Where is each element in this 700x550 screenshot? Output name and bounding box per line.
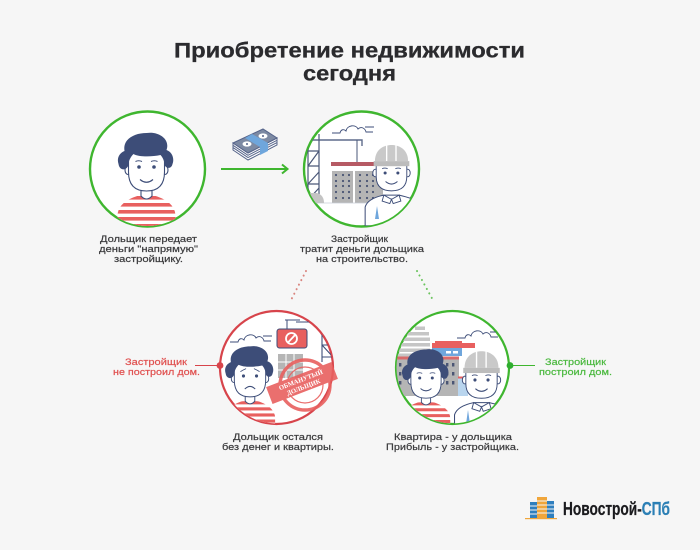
dotted connector: to failure	[290, 271, 306, 302]
title: Приобретение недвижимости	[174, 38, 525, 62]
panel: developer did not build	[113, 311, 338, 453]
failure caption	[222, 432, 334, 453]
success label with connector: построил дом.	[539, 367, 612, 378]
failure caption: без денег и квартиры.	[222, 442, 334, 453]
panel: developer	[300, 112, 425, 265]
construction scene	[307, 125, 411, 226]
stamp: deceived investor: ОБМАНУТЫЙ	[278, 368, 325, 392]
developer circle	[304, 112, 419, 226]
investor caption: деньги "напрямую"	[99, 244, 198, 255]
investor caption: Дольщик передает	[100, 234, 198, 245]
failure label with connector: Застройщик	[125, 357, 188, 368]
developer caption	[300, 234, 425, 265]
icon: logo buildings	[525, 497, 557, 519]
failure label with connector	[113, 357, 223, 378]
success scene	[396, 326, 502, 424]
success circle	[396, 311, 509, 424]
developer caption: на строительство.	[316, 254, 408, 265]
sad investor	[225, 346, 276, 424]
success caption	[386, 432, 519, 453]
stamp: deceived investor	[266, 360, 338, 410]
panel: investor gives money	[90, 112, 205, 265]
success label with connector: Застройщик	[545, 357, 607, 368]
arrow: money to developer	[221, 164, 288, 174]
logo wordmark: Новострой-СПб	[563, 498, 670, 519]
panel: developer built the house	[386, 311, 612, 453]
title: сегодня	[303, 62, 396, 86]
failure circle	[220, 311, 333, 424]
icon: investor portrait	[116, 133, 176, 229]
developer caption: тратит деньги дольщика	[300, 244, 425, 255]
investor circle	[90, 112, 205, 226]
developer caption: Застройщик	[331, 234, 389, 245]
stamp: deceived investor: ДОЛЬЩИК	[286, 378, 322, 397]
logo: Novostroy-SPb	[525, 497, 670, 519]
failure label with connector: не построил дом.	[113, 367, 200, 378]
success label with connector	[507, 357, 612, 378]
failure caption: Дольщик остался	[233, 432, 323, 443]
success caption: Квартира - у дольщика	[394, 432, 513, 443]
success caption: Прибыль - у застройщика.	[386, 442, 519, 453]
investor caption: застройщику.	[114, 254, 183, 265]
dotted connector: to success	[417, 271, 434, 302]
failure scene	[224, 320, 333, 430]
icon: stack of money	[233, 129, 277, 160]
title	[174, 38, 525, 86]
investor caption	[99, 234, 198, 265]
